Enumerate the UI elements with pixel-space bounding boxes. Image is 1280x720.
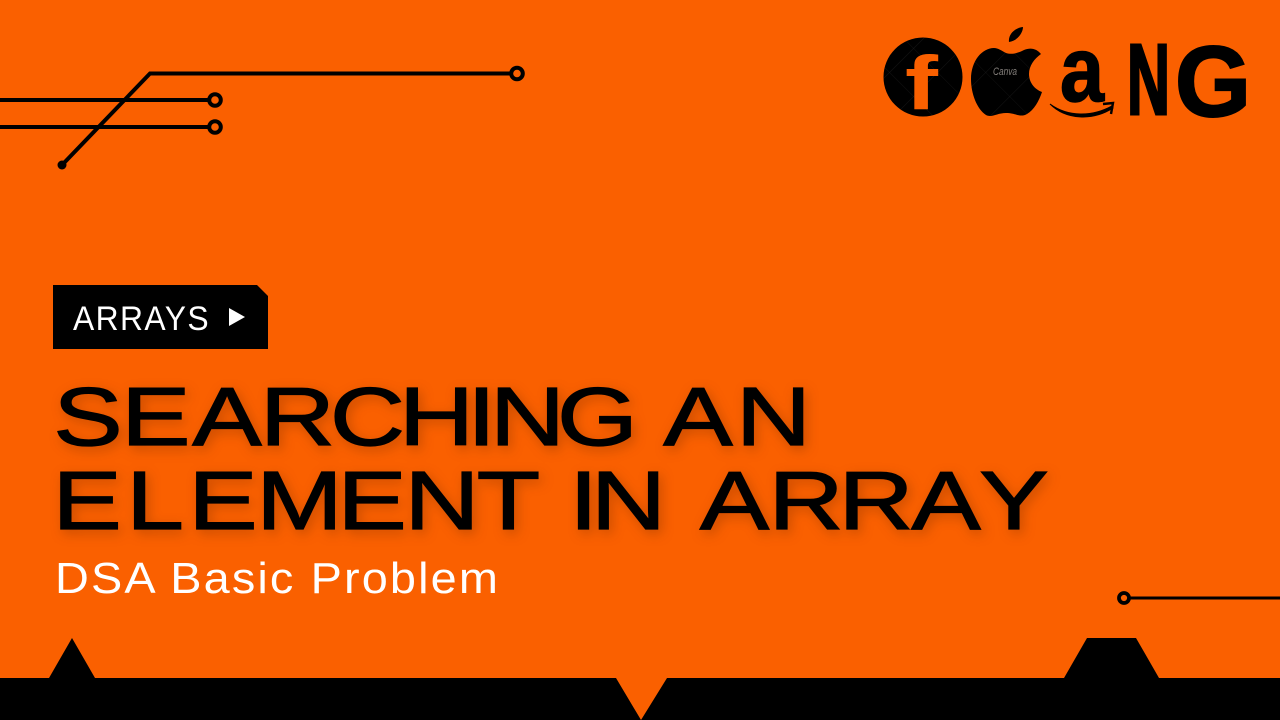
bottom bar with notch and raised shapes [0, 638, 1280, 720]
icon: Facebook logo: f [905, 41, 939, 126]
title: ELEMENT IN ARRAY [52, 454, 1049, 547]
logos: FAANG [884, 19, 1251, 138]
tag: Arrays: ARRAYS [73, 300, 210, 338]
letter N: N [1127, 24, 1170, 136]
icon: Facebook logo [884, 38, 962, 126]
circuit line: right [1119, 593, 1280, 603]
letter G: G [1175, 26, 1251, 138]
circuit lines: top left [0, 68, 523, 170]
icon: play triangle [229, 308, 245, 326]
icon: Apple logo [971, 27, 1042, 116]
subtitle: DSA Basic Problem [55, 554, 500, 603]
title [52, 370, 1049, 547]
watermark text: Canva [993, 66, 1017, 78]
icon: Amazon logo: a [1060, 19, 1105, 121]
tag: Arrays [53, 285, 268, 349]
title: SEARCHING AN [53, 370, 811, 463]
